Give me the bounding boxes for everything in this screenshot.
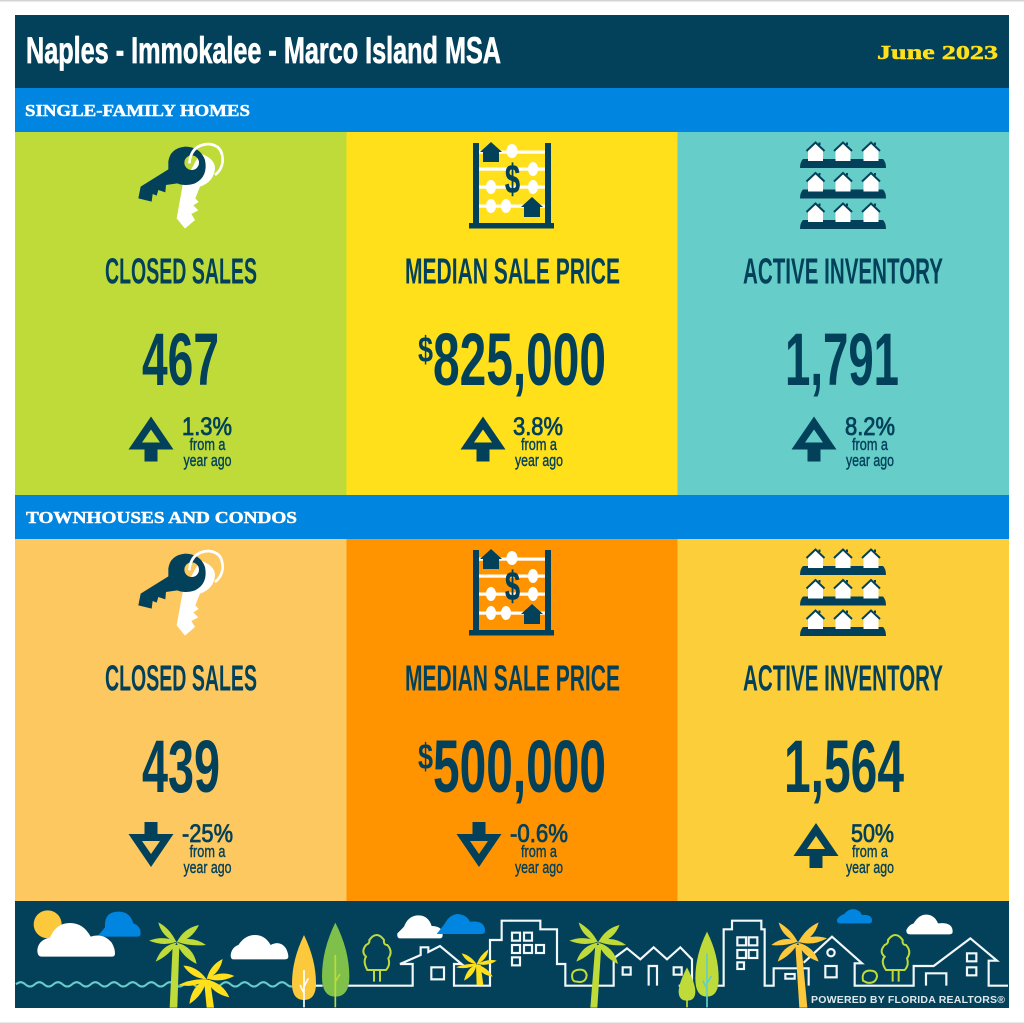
arrow down (128, 822, 174, 867)
title: Naples - Immokalee - Marco Island MSA (26, 30, 501, 71)
value: 439: 439 (142, 725, 220, 808)
section bar: single-family homes (15, 88, 1009, 132)
value: $825,000: 825,000 (433, 318, 606, 401)
value: $500,000: $ (418, 736, 433, 777)
change: -0.6%: from a (521, 842, 557, 861)
icon: yellow palm (178, 959, 234, 1008)
arrow down (456, 822, 502, 867)
panel: townhouse median sale price (346, 539, 678, 902)
value: 1,791: 1,791 (785, 318, 899, 401)
change: 3.8% (513, 413, 563, 470)
change: 8.2%: 8.2% (845, 413, 895, 441)
change: 50%: year ago (846, 858, 894, 877)
icon: abacus (469, 549, 554, 636)
change: -25% (182, 820, 233, 877)
heading: closed sales: CLOSED SALES (105, 250, 257, 292)
icon: blue cloud over house (437, 914, 485, 934)
icon: houses on shelves (800, 550, 886, 636)
change: 3.8%: 3.8% (513, 413, 563, 441)
value: $500,000: 500,000 (433, 725, 606, 808)
waves (16, 982, 296, 986)
panel: townhouse active inventory (678, 539, 1009, 902)
arrow up (794, 823, 838, 868)
value: $500,000 (418, 725, 606, 808)
icon: keys (138, 144, 223, 229)
arrow up (128, 416, 174, 462)
icon: white cloud (37, 923, 115, 957)
panel: single-family closed sales (15, 132, 346, 496)
icon: small yellow palm (456, 949, 497, 985)
icon: yellow tree (292, 935, 316, 1007)
icon: green palm (569, 922, 626, 1008)
change: 50%: from a (852, 842, 888, 861)
change: -0.6%: year ago (515, 858, 563, 877)
panel: single-family median sale price (346, 132, 678, 496)
icon: white cloud over house (397, 915, 443, 938)
change: 50% (846, 820, 894, 877)
icon: keys (138, 551, 223, 636)
value: 1,564: 1,564 (784, 725, 904, 808)
change: 1.3%: year ago (184, 451, 232, 470)
change: -25%: -25% (182, 820, 233, 848)
change: 1.3%: 1.3% (182, 413, 232, 441)
change: 3.8%: from a (521, 435, 557, 454)
change: -25%: year ago (184, 858, 232, 877)
change: -25%: from a (190, 842, 226, 861)
arrow up (792, 416, 836, 462)
windows (512, 933, 976, 979)
value: $825,000 (418, 318, 606, 401)
heading: median sale price: MEDIAN SALE PRICE (405, 250, 620, 292)
icon: bushes (572, 970, 877, 983)
section bar: townhouses and condos: TOWNHOUSES AND CONDOS (26, 508, 297, 527)
icon: outline tree (882, 935, 909, 982)
header band (15, 15, 1009, 89)
footer: coastal skyline illustration (15, 901, 1009, 1008)
icon: orange palm (771, 922, 827, 1008)
section bar: single-family homes: SINGLE-FAMILY HOMES (25, 101, 250, 120)
value: 467: 467 (142, 318, 219, 401)
left half of skyline (16, 910, 512, 1008)
change: -0.6% (510, 820, 568, 877)
change: -0.6%: -0.6% (510, 820, 568, 848)
change: 8.2%: year ago (846, 451, 894, 470)
change: 8.2%: from a (852, 435, 888, 454)
icon: twin trees (679, 932, 719, 1007)
icon: white cloud (906, 915, 953, 934)
icon: houses on shelves (800, 142, 886, 229)
change: 3.8%: year ago (515, 451, 563, 470)
section bar: townhouses and condos (15, 495, 1009, 540)
heading: closed sales: CLOSED SALES (105, 658, 257, 698)
panel: single-family active inventory (678, 132, 1009, 496)
value: $825,000: $ (418, 329, 433, 370)
panel: townhouse closed sales (15, 539, 346, 902)
arrow up (460, 416, 506, 462)
icon: green palm (149, 922, 206, 1008)
icon: blue cloud (97, 912, 141, 937)
credit line: POWERED BY FLORIDA REALTORS® (811, 994, 1005, 1006)
date: June 2023 (877, 42, 998, 64)
outline of houses (315, 921, 512, 986)
icon: small white cloud (231, 935, 288, 959)
change: 1.3%: from a (190, 435, 226, 454)
change: 50%: 50% (851, 820, 894, 848)
outline of buildings (511, 921, 1008, 986)
change: 8.2% (845, 413, 895, 470)
icon: sun (34, 910, 62, 938)
icon: blue cloud (837, 909, 872, 923)
icon: outline tree (363, 935, 391, 982)
right half of skyline (511, 909, 1008, 1008)
heading: median sale price: MEDIAN SALE PRICE (405, 658, 620, 698)
icon: green tree (322, 923, 349, 1007)
icon: abacus (469, 142, 554, 228)
change: 1.3% (182, 413, 232, 470)
